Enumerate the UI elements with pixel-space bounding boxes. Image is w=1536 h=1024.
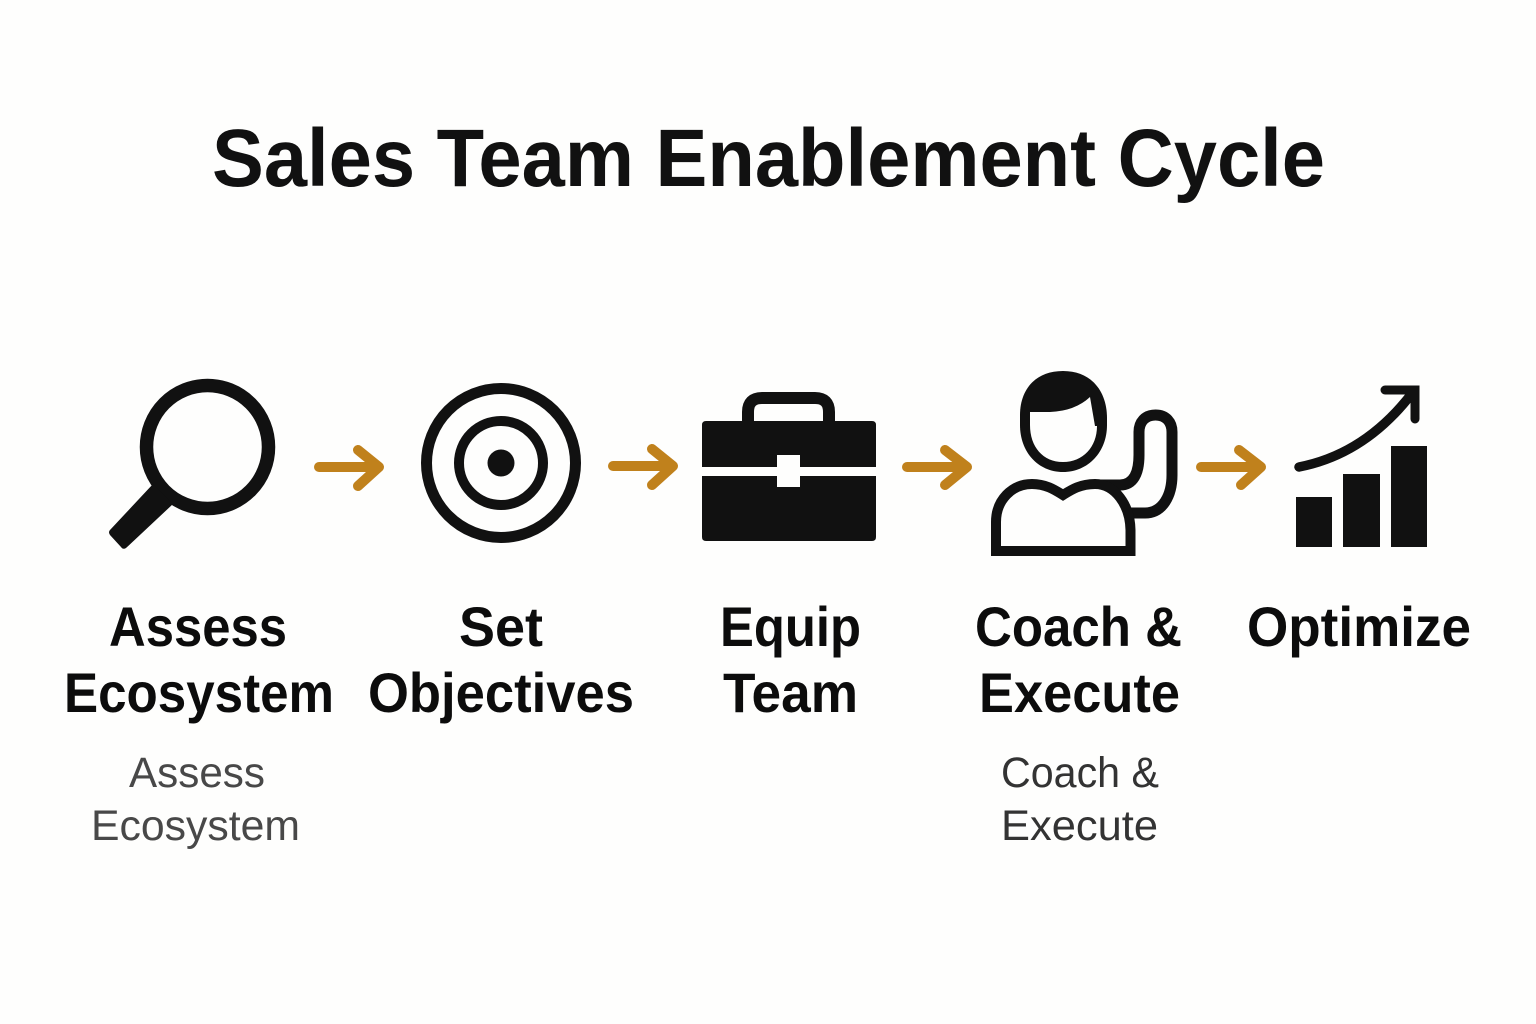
label: assess ecosystem (64, 595, 334, 724)
label: coach and execute: Coach & (975, 595, 1182, 658)
sublabel: coach and execute: Coach & (1001, 749, 1159, 797)
icon: target (426, 388, 576, 538)
sublabel: assess ecosystem: Assess (129, 749, 265, 797)
label: assess ecosystem: Assess (109, 595, 287, 658)
arrow 4 (1201, 450, 1261, 485)
label: set objectives (368, 595, 634, 724)
icon: magnifying glass (109, 386, 268, 549)
arrow 1 (319, 450, 379, 486)
icon: person waving (996, 371, 1172, 551)
label: coach and execute (975, 595, 1182, 724)
sublabel: coach and execute (1001, 749, 1159, 850)
icon: growth chart (1296, 390, 1427, 547)
sublabel: coach and execute: Execute (1001, 802, 1158, 850)
icon: briefcase (702, 398, 876, 541)
label: optimize: Optimize (1247, 595, 1471, 658)
label: equip team: Team (723, 661, 858, 724)
sublabel: assess ecosystem (91, 749, 300, 850)
sublabel: assess ecosystem: Ecosystem (91, 802, 300, 850)
arrow 3 (907, 450, 967, 485)
title: Sales Team Enablement Cycle (212, 113, 1325, 204)
label: coach and execute: Execute (979, 661, 1180, 724)
label: equip team: Equip (720, 595, 861, 658)
label: equip team (720, 595, 861, 724)
label: assess ecosystem: Ecosystem (64, 661, 334, 724)
label: set objectives: Objectives (368, 661, 634, 724)
arrow 2 (613, 449, 673, 485)
label: set objectives: Set (459, 595, 543, 658)
